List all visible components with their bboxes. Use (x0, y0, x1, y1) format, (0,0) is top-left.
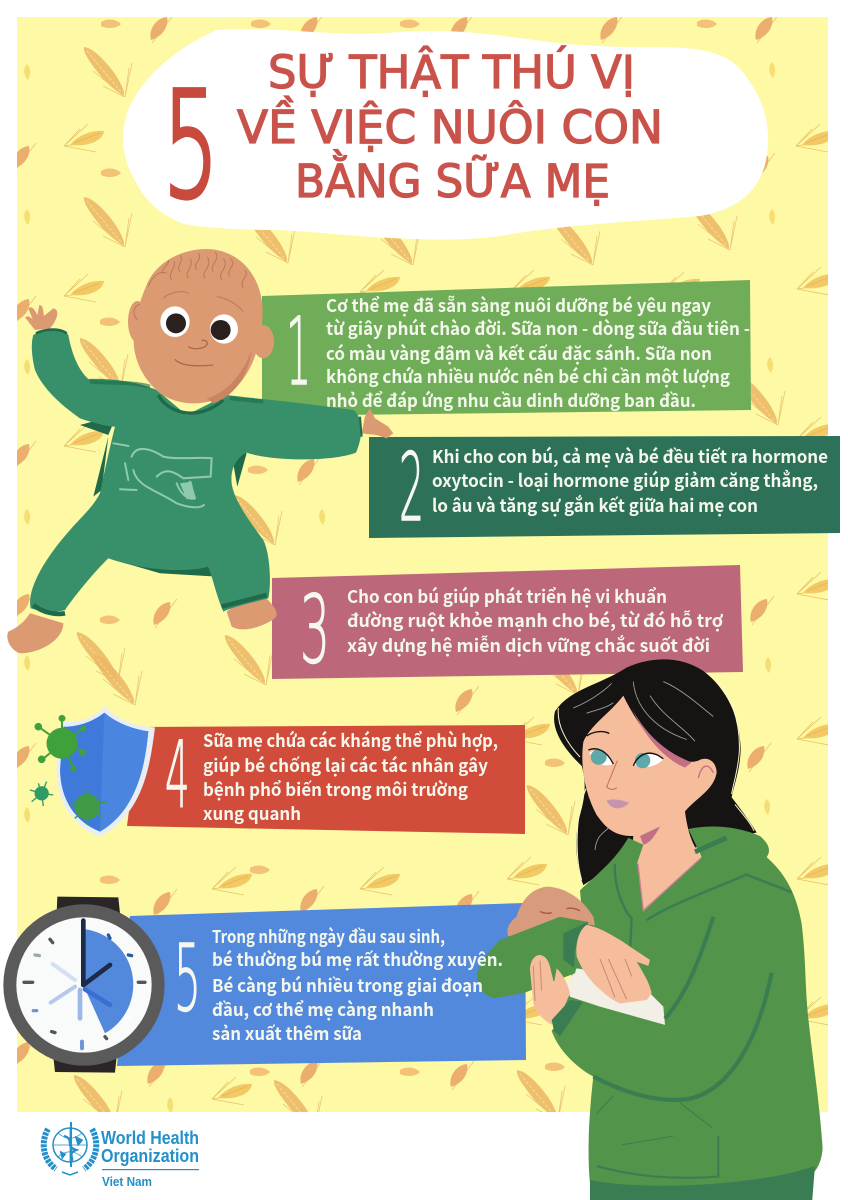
mother upper hand (576, 925, 652, 1003)
shield (57, 706, 155, 837)
baby feet (7, 595, 277, 653)
baby head (128, 249, 274, 403)
title text: SỰ THẬT THÚ VỊ (268, 46, 635, 99)
panel 4: red (127, 722, 525, 834)
panel 5 text: Bé càng bú nhiều trong giai đoạn (212, 973, 483, 998)
numeral 3: 3 (300, 575, 330, 685)
numeral 4: 4 (165, 722, 190, 829)
watch case (3, 904, 165, 1066)
baby suit shadows (80, 415, 247, 577)
panel 3 text: Cho con bú giúp phát triển hệ vi khuẩn (347, 584, 667, 609)
title text: BẰNG SỮA MẸ (295, 150, 610, 208)
baby eyes (160, 306, 238, 344)
finger lines (533, 959, 632, 1001)
large virus (35, 715, 86, 771)
panel 1 text: không chứa nhiều nước nên bé chỉ cần một lượng (326, 364, 731, 389)
panel 1 text (326, 293, 750, 413)
hour ticks (24, 935, 145, 1048)
WHO logo (44, 1122, 199, 1189)
WHO wordmark: Viet Nam (102, 1174, 152, 1189)
numeral 1: 1 (286, 298, 311, 407)
panel 1: light green (262, 280, 751, 416)
panel 5 text: bé thường bú mẹ rất thường xuyên. (212, 947, 503, 972)
panel 2 text: lo âu và tăng sự gắn kết giữa hai mẹ con (432, 493, 758, 518)
title numeral 5: 5 (163, 61, 219, 231)
panel 4 text (203, 728, 498, 826)
crocodile print (113, 443, 212, 507)
virus on shield (70, 788, 107, 825)
mother bangs shadow (632, 708, 692, 768)
baby body (477, 917, 588, 998)
small teal virus (30, 782, 53, 806)
baby illustration (7, 249, 393, 653)
baby nose and mouth (175, 340, 213, 366)
title block (123, 29, 768, 240)
numeral 5: 5 (174, 925, 201, 1032)
numeral 2: 2 (399, 434, 424, 543)
panel 3: rose (272, 565, 743, 685)
panel 5 text: sản xuất thêm sữa (212, 1021, 362, 1046)
hoodie hem (590, 1166, 815, 1200)
baby head (507, 887, 595, 940)
panel 4 text: bệnh phổ biến trong môi trường (203, 777, 469, 802)
clock hands (51, 921, 110, 1018)
panel 3 text (347, 584, 723, 658)
mother nose, lips, ear (607, 761, 617, 789)
mother and baby illustration (477, 659, 823, 1200)
baby closed eyes (540, 908, 580, 913)
WHO wordmark: World Health (101, 1127, 199, 1148)
elapsed-time sector (83, 929, 133, 1033)
panel 5 text: Trong những ngày đầu sau sinh, (212, 924, 445, 949)
mother lower hand (530, 955, 570, 1025)
baby wrapped in arms (477, 887, 733, 1078)
white blanket (567, 968, 665, 1025)
neckline pink edge (638, 859, 700, 910)
panel 5 text (212, 924, 503, 1046)
mother hair (554, 659, 757, 885)
panel 1 text: có màu vàng đậm và kết cấu đặc sánh. Sữa non (326, 341, 712, 366)
panel 1 text: từ giây phút chào đời. Sữa non - dòng sữa đầu tiên - (326, 316, 750, 341)
hoodie (553, 827, 823, 1200)
watch face (16, 917, 152, 1053)
panel 3 text: đường ruột khỏe mạnh cho bé, từ đó hỗ trợ (347, 608, 723, 633)
watch icon (3, 897, 165, 1073)
mother lower sleeve (552, 966, 733, 1078)
sleeve fold lines (593, 917, 772, 1100)
WHO wordmark: Organization (101, 1145, 199, 1166)
baby sleeve cuff (563, 922, 588, 968)
hair edge highlights (558, 676, 754, 880)
panel 1 text: nhỏ để đáp ứng nhu cầu dinh dưỡng ban đầu. (326, 388, 696, 413)
watch straps (53, 897, 120, 1073)
panel 2 text: Khi cho con bú, cả mẹ và bé đều tiết ra hormone (432, 444, 828, 469)
lower cuff (552, 1000, 583, 1036)
WHO wordmark (101, 1127, 199, 1189)
title text: VỀ VIỆC NUÔI CON (237, 97, 663, 154)
shield with viruses icon (30, 706, 155, 837)
panel 2 text (432, 444, 828, 518)
mother eyes (587, 732, 663, 768)
panel 5: blue (117, 903, 526, 1066)
title text (237, 46, 663, 208)
mother hair highlights (573, 682, 713, 850)
panel 4 text: Sữa mẹ chứa các kháng thể phù hợp, (203, 728, 498, 753)
baby suit (30, 329, 361, 612)
panel 3 text: xây dựng hệ miễn dịch vững chắc suốt đời (347, 633, 710, 658)
panel 2: dark green (369, 434, 840, 543)
baby left hand (25, 305, 57, 330)
panel 1 text: Cơ thể mẹ đã sẵn sàng nuôi dưỡng bé yêu ngay (326, 293, 711, 318)
panel 2 text: oxytocin - loại hormone giúp giảm căng thẳng, (432, 468, 818, 493)
mother face and neck (582, 696, 717, 913)
panel 4 text: giúp bé chống lại các tác nhân gây (203, 753, 488, 778)
baby suit details (33, 330, 362, 614)
baby hair (134, 252, 246, 320)
panel 5 text: đầu, cơ thể mẹ càng nhanh (212, 997, 434, 1022)
hoodie details (597, 838, 792, 1178)
baby right hand (362, 408, 393, 438)
title white blob (123, 29, 768, 240)
WHO emblem (44, 1122, 96, 1175)
panel 4 text: xung quanh (203, 801, 301, 826)
